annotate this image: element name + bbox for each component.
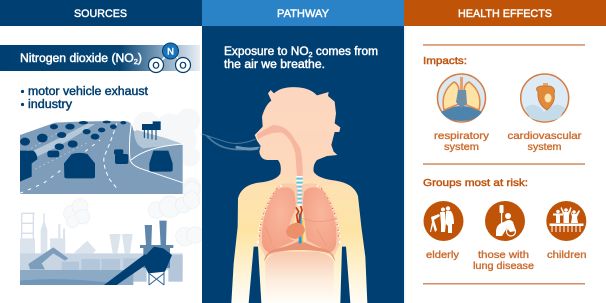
breath — [202, 134, 259, 150]
cars — [20, 121, 173, 182]
road markings — [20, 122, 183, 193]
health effects header — [404, 0, 606, 26]
pathway text: comes from — [313, 46, 378, 58]
ribs dots — [258, 185, 281, 243]
label: elderly: elderly — [426, 250, 459, 261]
icon: NO2 molecule: N — [167, 46, 174, 58]
blood vessels — [296, 206, 303, 243]
panel: sources — [0, 0, 203, 303]
panel: health effects — [404, 0, 606, 303]
heading: impacts: Impacts: — [423, 55, 467, 67]
label: cardiovascular system — [508, 131, 582, 153]
heading: groups most at risk: Groups most at risk: — [423, 177, 528, 189]
pathway text: 2 — [309, 52, 313, 59]
heart — [286, 223, 305, 239]
icon: children — [546, 201, 586, 241]
health effects header: HEALTH EFFECTS — [458, 8, 552, 20]
nitrogen dioxide banner: 2 — [134, 59, 138, 66]
pathway header — [202, 0, 404, 26]
label: respiratory system — [434, 131, 489, 153]
foreground ground — [20, 270, 133, 285]
label: cardiovascular system: cardiovascular — [508, 131, 582, 142]
icon: NO2 molecule: O — [152, 60, 160, 70]
source list: motor vehicle exhaust — [28, 86, 149, 98]
background plant — [22, 213, 44, 260]
airway — [257, 125, 303, 177]
illustration: human respiratory system — [202, 87, 367, 303]
trachea — [296, 176, 303, 206]
sources header — [0, 0, 202, 26]
illustration: industry — [20, 182, 203, 285]
nitrogen dioxide banner: ) — [138, 53, 142, 65]
smokestacks — [140, 221, 173, 268]
pathway text: Exposure to NO — [224, 46, 306, 58]
icon: NO2 molecule — [148, 43, 190, 72]
label: cardiovascular system: system — [528, 142, 562, 153]
nitrogen dioxide banner — [0, 45, 200, 71]
icon: cardiovascular system — [521, 74, 569, 122]
pathway header: PATHWAY — [277, 8, 330, 20]
panel: pathway — [202, 0, 404, 303]
label: those with lung disease: lung disease — [473, 261, 534, 272]
pathway text: the air we breathe. — [224, 59, 325, 71]
nitrogen dioxide banner: Nitrogen dioxide (NO — [20, 53, 127, 65]
pathway text — [224, 46, 378, 71]
conveyor and hopper — [104, 247, 172, 285]
icon: NO2 molecule: O — [179, 60, 187, 70]
illustration: highway traffic — [20, 108, 201, 196]
rib cage outline — [259, 183, 302, 257]
source list — [21, 86, 149, 111]
road sign — [142, 121, 161, 140]
source list: industry — [28, 99, 72, 111]
label: those with lung disease: those with — [478, 250, 529, 261]
label: respiratory system: system — [444, 142, 479, 153]
label: children: children — [547, 250, 586, 261]
silhouette — [231, 87, 367, 303]
label: those with lung disease — [473, 250, 534, 272]
icon: respiratory system — [438, 74, 486, 122]
lungs — [262, 187, 296, 253]
icon: lung disease — [485, 201, 525, 241]
sources header: SOURCES — [74, 8, 127, 20]
icon: elderly — [424, 201, 464, 241]
diaphragm — [264, 240, 335, 262]
label: respiratory system: respiratory — [434, 131, 489, 142]
